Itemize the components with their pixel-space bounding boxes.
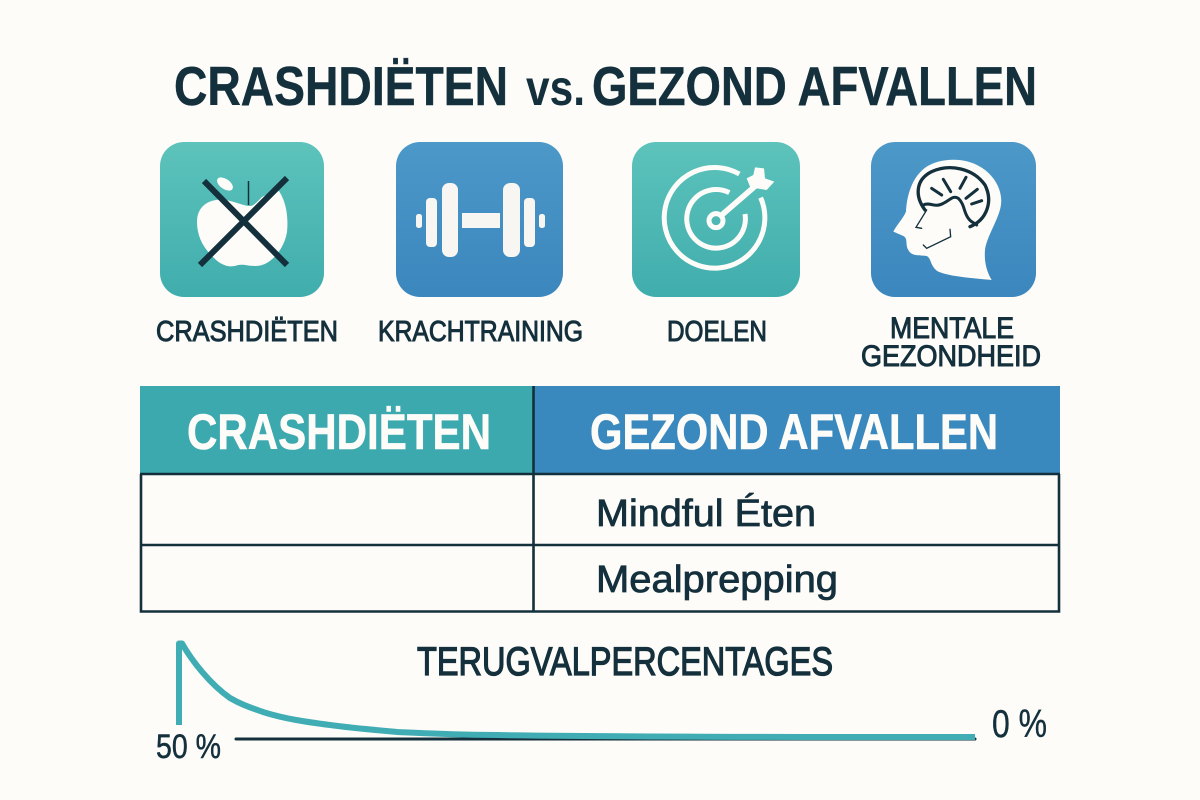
icon: target with arrow (632, 142, 800, 297)
label: 0%: 0 % (992, 703, 1047, 746)
icon label: krachttraining: KRACHTRAINING (378, 316, 583, 348)
header: crashdiëten: CRASHDIËTEN (187, 404, 491, 460)
title: GEZOND AFVALLEN (592, 55, 1037, 117)
icon: head with brain (871, 142, 1036, 297)
header: gezond afvallen (533, 386, 1060, 474)
icon label: crashdiëten: CRASHDIËTEN (156, 316, 338, 348)
icon label: doelen: DOELEN (667, 316, 767, 348)
icon label: mentale gezondheid: MENTALE (890, 312, 1014, 345)
header: crashdiëten (140, 386, 533, 474)
icon: crossed-out apple (160, 142, 324, 297)
label: 50%: 50 % (156, 728, 221, 766)
relapse line chart (179, 644, 975, 739)
title: CRASHDIËTEN (174, 55, 508, 117)
header: gezond afvallen: GEZOND AFVALLEN (590, 404, 998, 460)
title: vs. (526, 60, 585, 116)
icon label: mentale gezondheid: GEZONDHEID (861, 340, 1041, 373)
cell: mealprepping: Mealprepping (596, 559, 838, 601)
icon label: mentale gezondheid (861, 312, 1041, 373)
chart heading: TERUGVALPERCENTAGES (417, 640, 833, 684)
comparison table (140, 386, 1060, 612)
cell: mindful eten: Mindful Éten (596, 492, 816, 535)
icon: dumbbell (396, 142, 563, 297)
title (174, 55, 1037, 117)
